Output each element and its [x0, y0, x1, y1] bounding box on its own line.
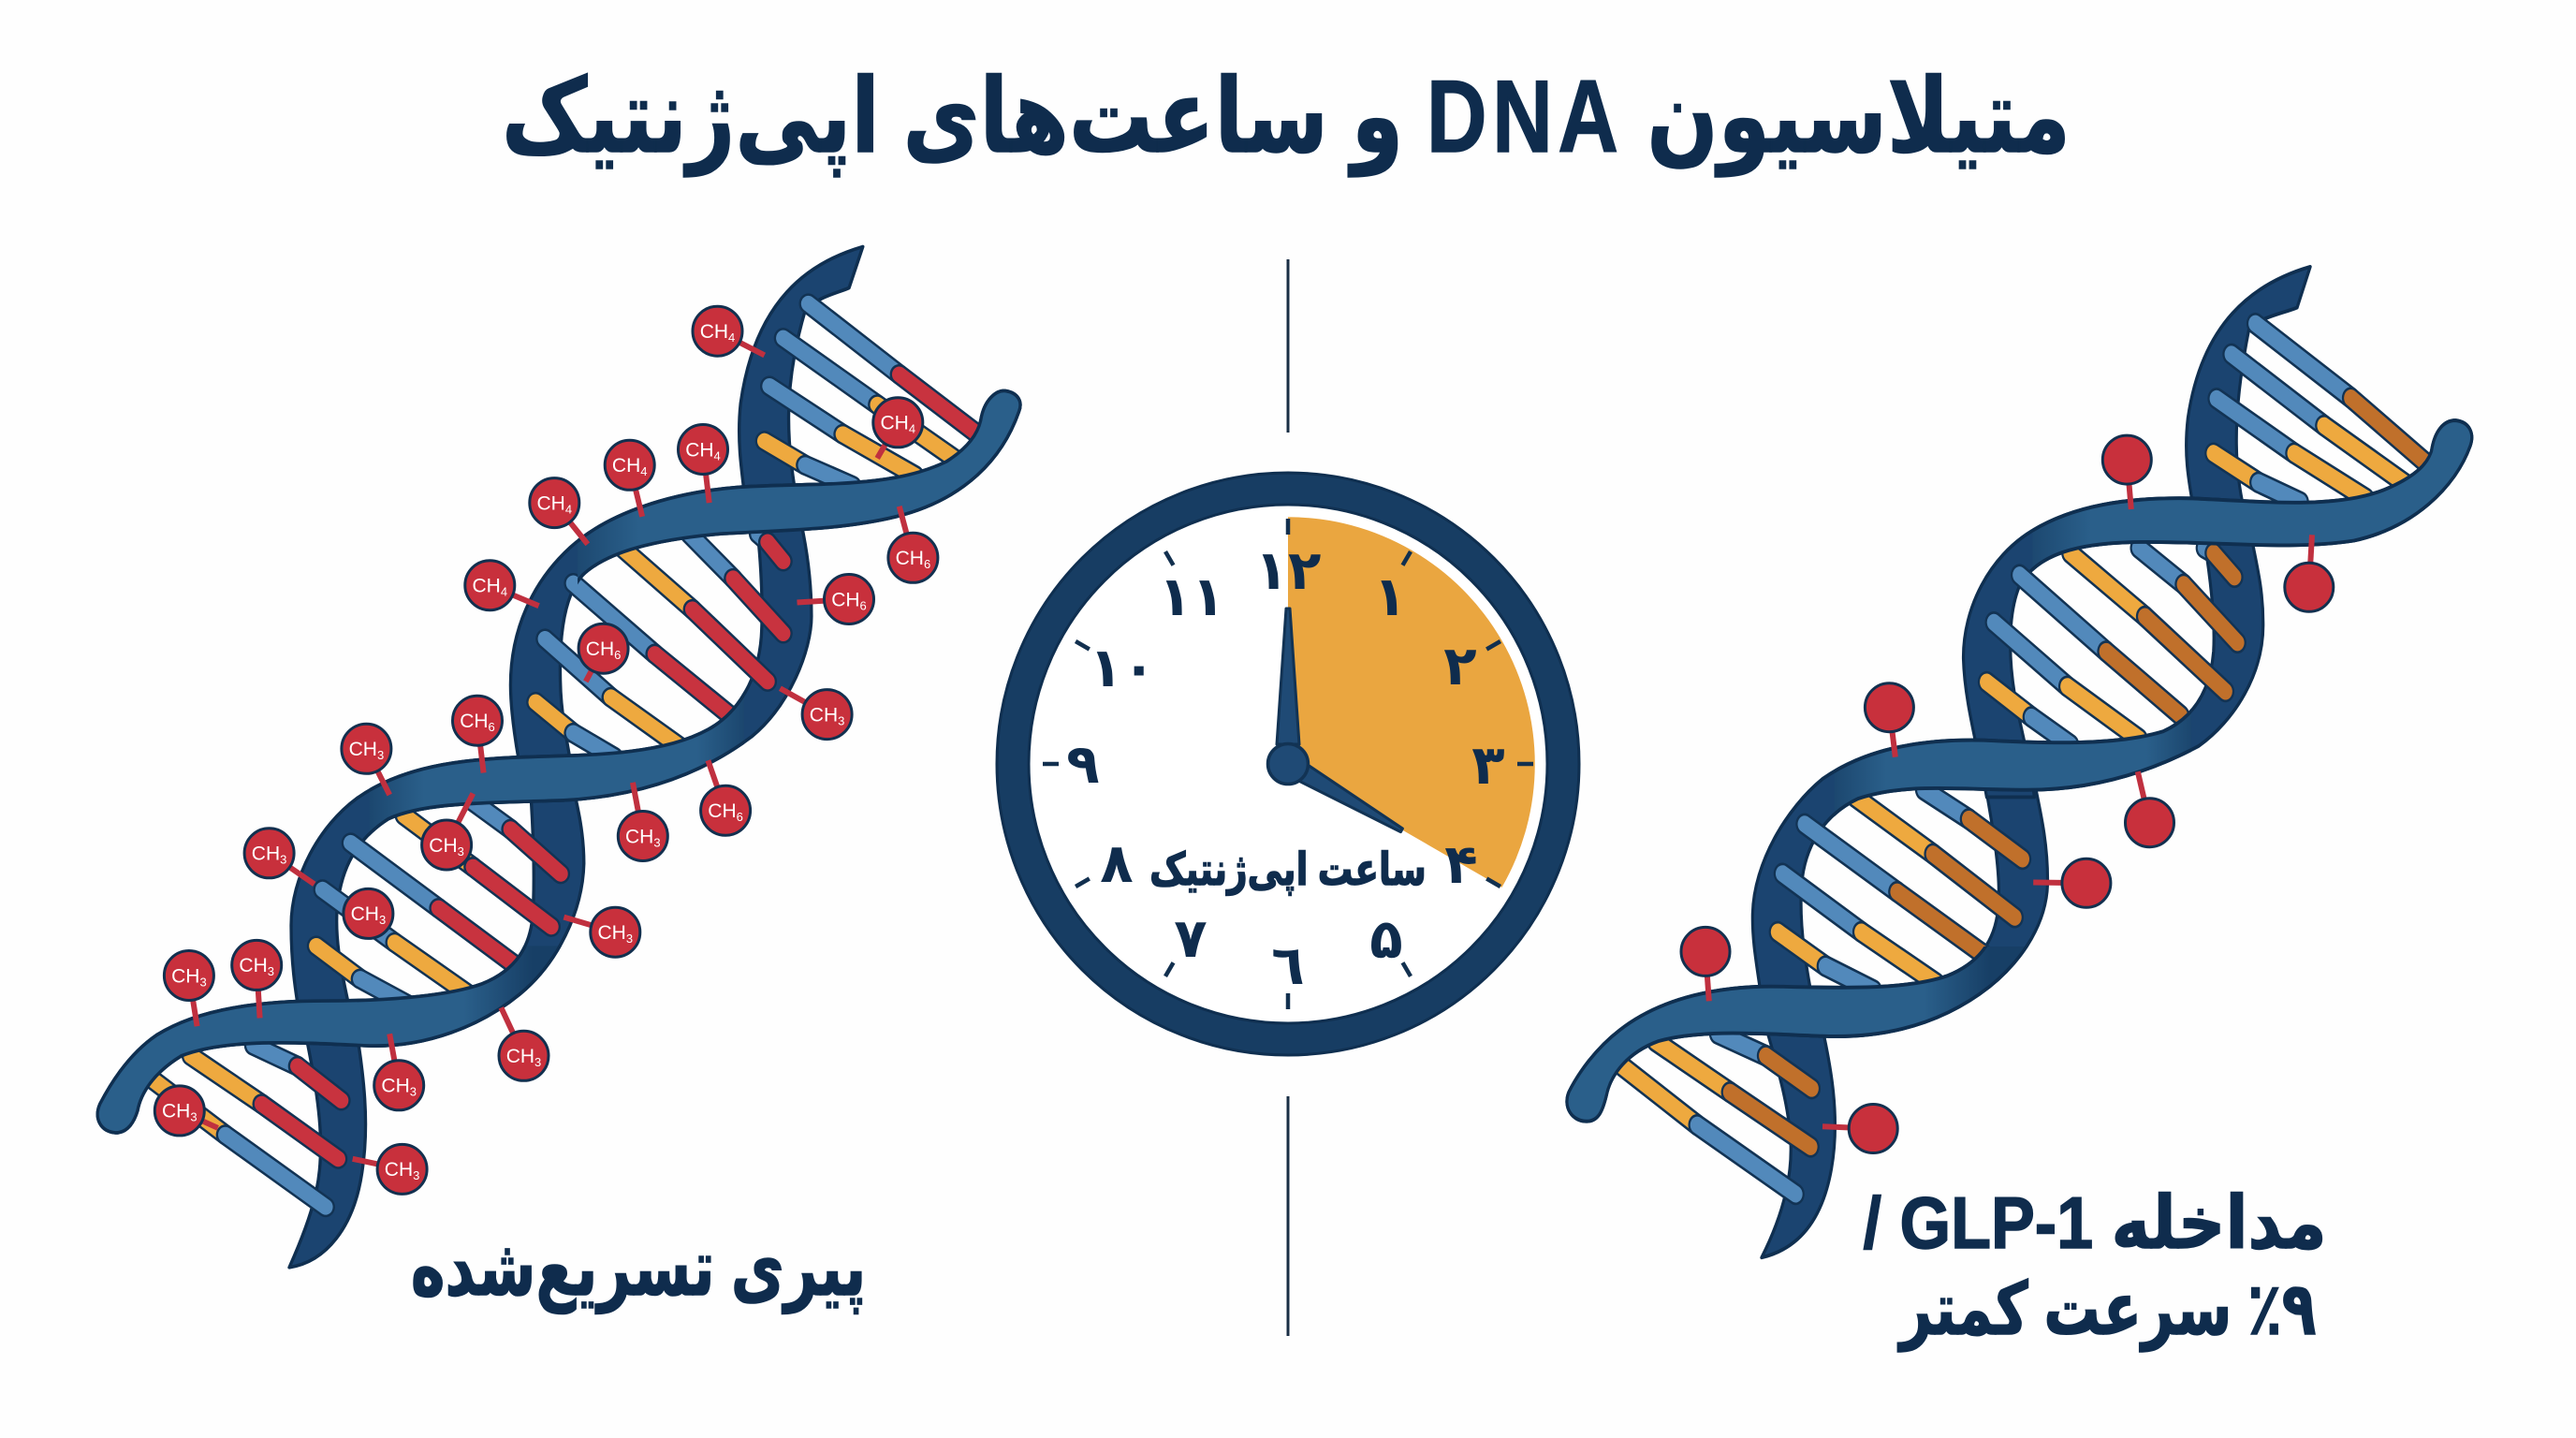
methyl groups: CH labels on left helix: CH	[685, 439, 714, 461]
back strands	[97, 246, 1020, 1268]
methyl groups: CH labels on left helix: CH	[625, 826, 653, 847]
methyl groups: CH labels on left helix: CH	[349, 739, 377, 760]
methyl groups: CH labels on left helix: CH	[381, 1076, 410, 1097]
methyl groups: CH labels on left helix: CH	[700, 321, 728, 343]
methyl groups: CH labels on left helix: 4	[728, 330, 735, 345]
methyl groups: CH labels on left helix: 6	[860, 598, 867, 612]
base-pair rungs	[1614, 324, 2437, 1195]
label: GLP-1 intervention	[1863, 1182, 2327, 1352]
methyl groups: CH labels on left helix: 3	[410, 1085, 417, 1099]
methyl groups: CH labels on left helix: 6	[614, 648, 621, 662]
methyl groups: CH labels on left helix: 3	[838, 713, 844, 727]
methyl groups: CH labels on left helix: CH	[162, 1101, 190, 1123]
hour numerals: ۱۰	[1090, 636, 1155, 699]
hour hand	[1282, 755, 1402, 832]
methyl groups: CH labels on left helix: CH	[351, 903, 379, 925]
methyl groups: CH labels on left helix: 4	[714, 448, 721, 462]
label: accelerated aging: پیری تسریع‌شده	[411, 1224, 866, 1313]
methyl groups: CH labels on left helix: 3	[413, 1168, 419, 1182]
methyl groups: CH labels on left helix: CH	[171, 965, 199, 987]
hour numerals	[1066, 538, 1505, 997]
back strands	[1567, 267, 2472, 1257]
methyl groups: CH labels on left helix: 3	[377, 748, 384, 762]
methyl groups: CH labels on left helix: CH	[252, 844, 280, 865]
front ribbons	[1567, 420, 2472, 1122]
methyl groups: CH labels on left helix: 3	[626, 932, 633, 946]
methyl groups: CH labels on left helix: CH	[385, 1159, 413, 1181]
methyl groups: CH labels on left helix: CH	[586, 638, 614, 660]
methyl groups: CH labels on left helix: CH	[831, 589, 860, 610]
hour numerals: ۹	[1066, 732, 1100, 796]
methyl groups: CH labels on left helix: 6	[489, 720, 495, 734]
hour numerals: ۱	[1373, 565, 1407, 628]
methyl groups: CH labels on left helix	[154, 306, 938, 1194]
clock face	[1013, 489, 1563, 1039]
methyl groups: CH labels on left helix: 4	[501, 584, 507, 599]
dna helix: GLP-1 intervention (right)	[1567, 267, 2472, 1257]
hour numerals: ۱۲	[1255, 538, 1321, 602]
methyl groups: CH labels on left helix: 3	[190, 1110, 198, 1124]
hour numerals: ۴	[1444, 832, 1478, 896]
divider: upper	[1286, 259, 1290, 433]
orange wedge: 12 to 4	[1288, 517, 1535, 888]
hour numerals: ۳	[1471, 733, 1505, 797]
hour numerals: ۵	[1369, 907, 1403, 971]
methyl groups: CH labels on left helix: CH	[896, 548, 924, 569]
methyl groups: CH labels on left helix: 4	[640, 464, 647, 478]
methyl groups: CH labels on left helix: 4	[565, 502, 572, 516]
methyl groups: CH labels on left helix: CH	[537, 492, 565, 514]
clock	[997, 473, 1579, 1055]
label: GLP-1 intervention: ۹٪ سرعت کمتر	[1897, 1268, 2316, 1352]
methyl groups: CH labels on left helix: CH	[612, 455, 640, 477]
methyl groups: CH labels on left helix: 3	[534, 1055, 541, 1069]
hour numerals: ۲	[1443, 634, 1477, 697]
hour numerals: ٦	[1271, 933, 1305, 997]
methyl groups: CH labels on left helix: 3	[458, 844, 464, 858]
label: GLP-1 intervention: مداخله GLP-1 /	[1863, 1182, 2327, 1264]
methyl groups: CH labels on left helix: CH	[429, 835, 458, 857]
methyl groups: CH labels on left helix: CH	[473, 575, 501, 597]
methyl groups: CH labels on left helix: 6	[737, 810, 743, 824]
methyl groups: CH labels on left helix: 3	[199, 975, 207, 989]
methyl groups: CH labels on left helix: CH	[460, 711, 489, 732]
methyl groups: CH labels on left helix: 3	[379, 913, 386, 927]
methyl groups: CH labels on left helix: CH	[881, 413, 909, 434]
minute hand	[1277, 609, 1299, 744]
methyl groups: CH labels on left helix: CH	[810, 704, 838, 726]
methyl groups: CH labels on left helix: CH	[708, 800, 737, 822]
center hub	[1267, 743, 1309, 785]
methyl groups: CH labels on left helix: 4	[909, 422, 915, 436]
base-pair rungs	[144, 303, 984, 1207]
methyl groups: CH labels on left helix: 3	[268, 964, 274, 978]
divider: lower	[1286, 1096, 1290, 1336]
hour numerals: ۸	[1100, 831, 1134, 895]
dna helix: accelerated aging (left)	[97, 246, 1020, 1268]
clock rim edges	[997, 473, 1579, 1055]
title: متیلاسیون DNA و ساعت‌های اپی‌ژنتیک	[502, 59, 2071, 177]
methyl groups: CH labels on left helix: CH	[598, 922, 626, 944]
front ribbons	[97, 390, 1020, 1133]
methyl groups: plain red balls on right helix	[1681, 435, 2334, 1153]
tick marks	[1043, 519, 1533, 1009]
methyl groups: CH labels on left helix: 6	[924, 557, 930, 571]
hour numerals: ۱۱	[1159, 565, 1224, 628]
methyl groups: CH labels on left helix: CH	[506, 1046, 534, 1067]
methyl groups: CH labels on left helix: 3	[280, 853, 286, 867]
clock label: ساعت اپی‌ژنتیک	[1149, 845, 1427, 896]
hour numerals: ۷	[1174, 906, 1208, 970]
methyl groups: CH labels on left helix: CH	[239, 955, 268, 976]
methyl groups: CH labels on left helix: 3	[653, 835, 661, 849]
